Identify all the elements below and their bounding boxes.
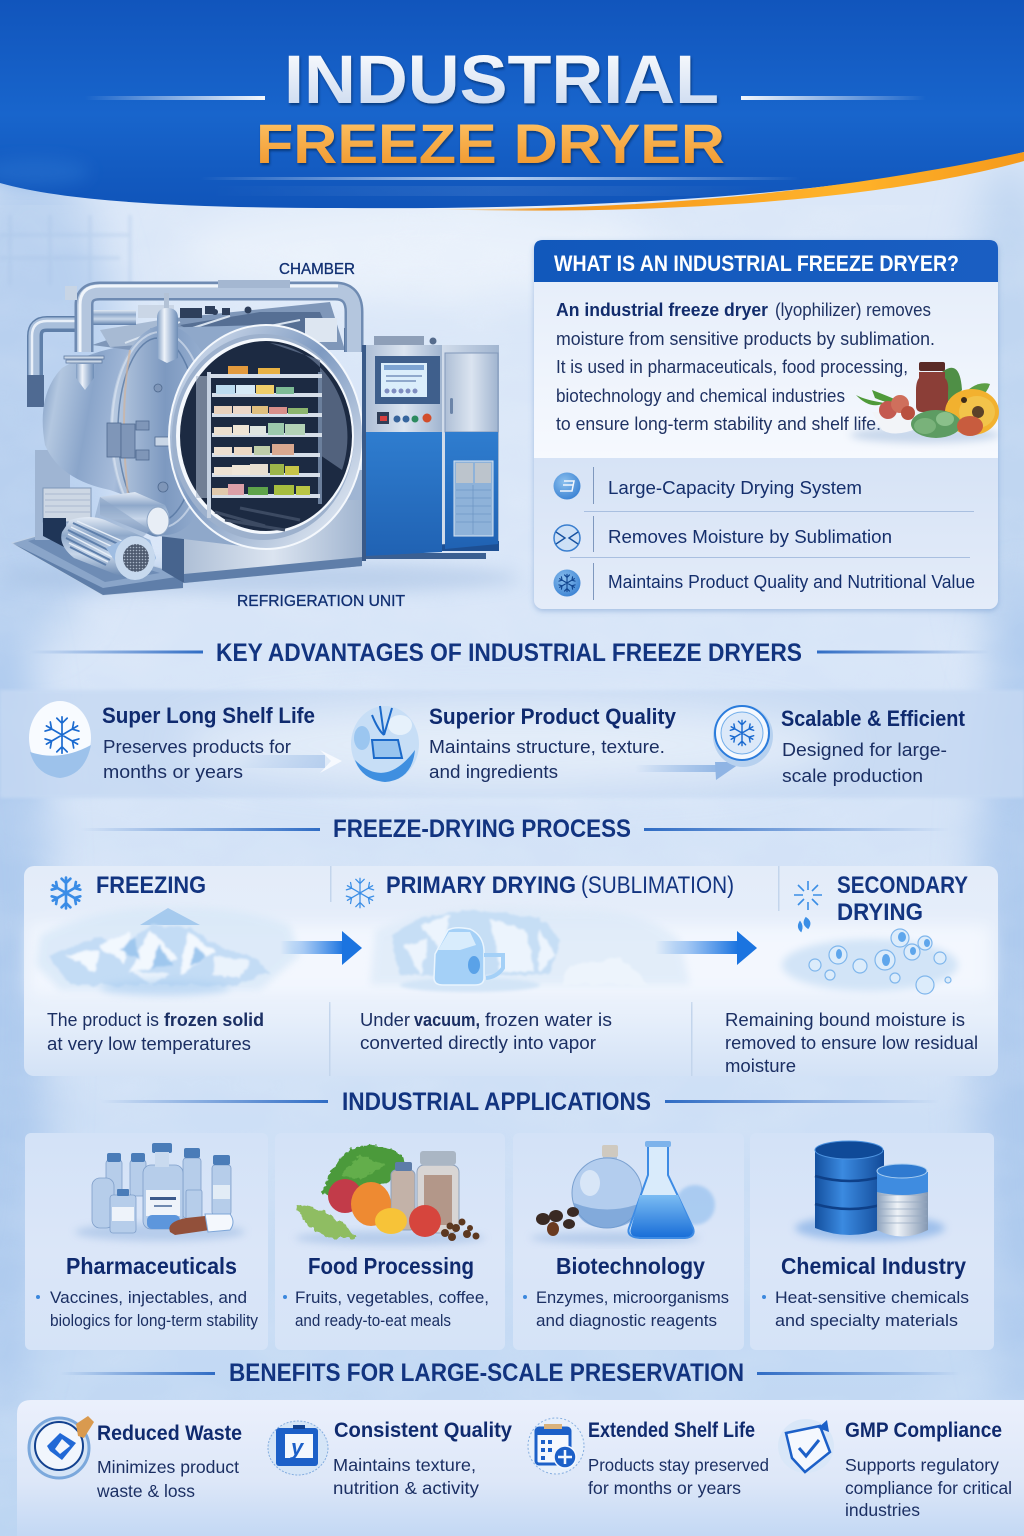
card: pharmaceuticals: biologics for long-term stability bbox=[50, 1311, 258, 1330]
benefit: consistent quality: Maintains texture, bbox=[333, 1455, 476, 1475]
main pipe bbox=[80, 286, 354, 352]
definition text: to ensure long-term stability and shelf life. bbox=[556, 414, 881, 434]
control cabinet bbox=[362, 336, 499, 561]
panel: benefits bbox=[17, 1400, 1024, 1536]
section heading: benefits bbox=[60, 1359, 960, 1387]
lower horizontal pipe bbox=[92, 310, 136, 325]
panel heading bar bbox=[534, 240, 998, 282]
benefit: GMP compliance: compliance for critical bbox=[845, 1478, 1012, 1498]
advantage 2: and ingredients bbox=[429, 762, 558, 782]
step 3: secondary drying: SECONDARY bbox=[837, 872, 968, 899]
card: chemical industry bbox=[750, 1133, 994, 1350]
advantage 1: Preserves products for bbox=[103, 737, 291, 757]
panel: freeze-drying process bbox=[24, 866, 998, 1076]
icon: consistent quality bbox=[268, 1421, 328, 1475]
snow scene band bbox=[30, 925, 990, 995]
step 3: secondary drying bbox=[725, 872, 978, 1076]
benefit: reduced waste: Minimizes product bbox=[97, 1457, 239, 1477]
advantage 2: Maintains structure, texture. bbox=[429, 737, 665, 757]
decorative title rule left bbox=[85, 96, 265, 100]
stand block bbox=[35, 450, 362, 583]
illustration: frozen product bbox=[36, 908, 300, 996]
control buttons bbox=[377, 412, 389, 424]
icon: consistent quality: y bbox=[290, 1435, 305, 1460]
compressor bbox=[100, 492, 169, 537]
advantage 2 bbox=[351, 704, 677, 782]
vent bbox=[454, 461, 493, 536]
top machinery bbox=[92, 302, 360, 352]
touch screen bbox=[375, 356, 440, 404]
label: refrigeration unit: REFRIGERATION UNIT bbox=[237, 593, 405, 610]
step 2: primary drying: PRIMARY DRYING bbox=[386, 872, 576, 899]
definition text: (lyophilizer) removes bbox=[775, 300, 931, 320]
icon: sublimation bbox=[554, 525, 580, 551]
card: food processing: and ready-to-eat meals bbox=[295, 1311, 451, 1330]
panel: what is an industrial freeze dryer bbox=[534, 240, 1000, 609]
advantage 1: Super Long Shelf Life bbox=[102, 703, 315, 728]
step 1: freezing: frozen solid bbox=[164, 1010, 264, 1030]
benefit: GMP compliance: industries bbox=[845, 1500, 920, 1520]
section heading: benefits: BENEFITS FOR LARGE-SCALE PRESERVATION bbox=[229, 1359, 744, 1387]
definition text bbox=[556, 300, 935, 434]
feature text 1: Large-Capacity Drying System bbox=[608, 478, 862, 498]
benefit: extended shelf life: Extended Shelf Life bbox=[588, 1419, 755, 1442]
step 3: secondary drying: removed to ensure low residual bbox=[725, 1033, 978, 1053]
card: chemical industry: and specialty materials bbox=[775, 1311, 958, 1330]
step 2: primary drying bbox=[346, 872, 734, 1053]
advantage 3: Scalable & Efficient bbox=[781, 706, 966, 731]
icon: calendar plus bbox=[528, 1418, 584, 1474]
icon: drying system bbox=[554, 472, 580, 500]
card: food processing: Fruits, vegetables, coffee, bbox=[295, 1288, 489, 1307]
definition text: It is used in pharmaceuticals, food processing, bbox=[556, 357, 908, 377]
icon: snowflake blue bbox=[52, 878, 80, 908]
step 2: primary drying: (SUBLIMATION) bbox=[581, 872, 734, 899]
benefit: consistent quality: nutrition & activity bbox=[333, 1478, 479, 1498]
freeze dryer machine illustration bbox=[0, 261, 520, 610]
card: biotechnology: Enzymes, microorganisms bbox=[536, 1288, 729, 1307]
vacuum cylinder bbox=[157, 293, 178, 363]
tray rack bbox=[196, 366, 322, 530]
advantage 1 bbox=[29, 701, 315, 782]
feature rows bbox=[554, 467, 975, 600]
card: chemical industry: Heat-sensitive chemicals bbox=[775, 1288, 969, 1307]
icon: snow snowflake bbox=[29, 701, 91, 778]
vacuum pump and motor bbox=[43, 488, 169, 580]
step 3: secondary drying: Remaining bound moisture is bbox=[725, 1010, 965, 1030]
coupling and cone bbox=[64, 356, 104, 390]
arrow: primary to secondary drying bbox=[655, 931, 757, 965]
advantage 3: scale production bbox=[782, 766, 923, 786]
card: pharmaceuticals: Pharmaceuticals bbox=[66, 1253, 237, 1279]
benefit: consistent quality bbox=[268, 1419, 512, 1498]
feature text 3: Maintains Product Quality and Nutritional Value bbox=[608, 572, 975, 592]
arrow 1 bbox=[235, 750, 342, 773]
section heading: key advantages bbox=[30, 639, 990, 667]
section heading: industrial applications bbox=[100, 1088, 940, 1116]
section heading: industrial applications: INDUSTRIAL APPLICATIONS bbox=[342, 1088, 651, 1116]
illustration: food bbox=[295, 1145, 485, 1245]
icon: reduced waste bbox=[29, 1416, 94, 1478]
benefit: reduced waste bbox=[29, 1416, 242, 1501]
header banner bbox=[0, 0, 1024, 211]
title line 1: INDUSTRIAL bbox=[284, 41, 719, 118]
step 3: secondary drying: DRYING bbox=[837, 899, 923, 926]
illustration: ice crystals bbox=[782, 929, 958, 994]
icon: scalable badge bbox=[713, 705, 773, 767]
benefit: extended shelf life bbox=[528, 1418, 769, 1498]
decorative title rule right bbox=[741, 96, 926, 100]
benefit: reduced waste: Reduced Waste bbox=[97, 1422, 242, 1445]
panel: key advantages bbox=[29, 701, 966, 786]
food illustration bbox=[850, 362, 1000, 443]
card: food processing bbox=[275, 1133, 505, 1350]
step 1: freezing: FREEZING bbox=[96, 872, 206, 899]
benefit: GMP compliance: GMP Compliance bbox=[845, 1419, 1002, 1442]
chamber opening bbox=[176, 338, 354, 534]
feature text 2: Removes Moisture by Sublimation bbox=[608, 527, 892, 547]
benefit: extended shelf life: Products stay preserved bbox=[588, 1455, 769, 1475]
benefit: GMP compliance bbox=[778, 1419, 1012, 1520]
chamber cylinder bbox=[43, 342, 165, 510]
door ring bbox=[169, 325, 363, 549]
panel heading bar: WHAT IS AN INDUSTRIAL FREEZE DRYER? bbox=[554, 251, 959, 276]
advantage 3: Designed for large- bbox=[782, 740, 947, 760]
definition text: moisture from sensitive products by sublimation. bbox=[556, 329, 935, 349]
card: chemical industry: Chemical Industry bbox=[781, 1253, 966, 1279]
step 2: primary drying: converted directly into vapor bbox=[360, 1033, 596, 1053]
icon: sparkle burst bbox=[794, 881, 822, 931]
flange bbox=[110, 325, 266, 549]
arrow: freezing to primary drying bbox=[280, 931, 362, 965]
definition text: An industrial freeze dryer bbox=[556, 300, 768, 320]
step 1: freezing bbox=[36, 872, 300, 1054]
advantage 1: months or years bbox=[103, 762, 243, 782]
benefit: GMP compliance: Supports regulatory bbox=[845, 1455, 999, 1475]
step 1: freezing: at very low temperatures bbox=[47, 1034, 251, 1054]
card: biotechnology: and diagnostic reagents bbox=[536, 1311, 717, 1330]
motor body bbox=[61, 517, 156, 579]
illustration: vials bbox=[75, 1143, 245, 1241]
door hinge bbox=[107, 384, 176, 492]
label: chamber: CHAMBER bbox=[279, 261, 355, 278]
illustration: flasks bbox=[530, 1141, 715, 1244]
step 3: secondary drying: moisture bbox=[725, 1056, 796, 1076]
definition text: biotechnology and chemical industries bbox=[556, 386, 845, 406]
advantage 2: Superior Product Quality bbox=[429, 704, 677, 729]
card: biotechnology bbox=[513, 1133, 744, 1350]
illustration: ice bottle bbox=[370, 908, 690, 992]
card: food processing: Food Processing bbox=[308, 1253, 474, 1279]
step 1: freezing: The product is bbox=[47, 1010, 159, 1030]
icon: snowflake thin bbox=[346, 878, 374, 908]
step 2: primary drying: frozen water is bbox=[485, 1010, 612, 1030]
panel: application cards bbox=[25, 1133, 994, 1350]
base platform bbox=[12, 535, 183, 595]
card: pharmaceuticals: Vaccines, injectables, and bbox=[50, 1288, 247, 1307]
illustration: drums bbox=[795, 1141, 945, 1241]
title line 2: FREEZE DRYER bbox=[256, 112, 725, 175]
section heading: freeze-drying process bbox=[80, 815, 950, 843]
step 2: primary drying: Under bbox=[360, 1010, 410, 1030]
arrow 2 bbox=[635, 762, 742, 780]
icon: frost bag bbox=[351, 706, 419, 782]
icon: quality bbox=[554, 570, 580, 596]
step 2: primary drying: vacuum, bbox=[414, 1010, 480, 1030]
advantage 3 bbox=[713, 705, 966, 786]
card: biotechnology: Biotechnology bbox=[556, 1253, 705, 1279]
card: pharmaceuticals bbox=[25, 1133, 268, 1350]
benefit: consistent quality: Consistent Quality bbox=[334, 1419, 512, 1442]
section heading: key advantages: KEY ADVANTAGES OF INDUSTRIAL FREEZE DRYERS bbox=[216, 639, 802, 667]
benefit: extended shelf life: for months or years bbox=[588, 1478, 741, 1498]
benefit: reduced waste: waste & loss bbox=[96, 1481, 195, 1501]
icon: GMP shield bbox=[778, 1419, 834, 1473]
section heading: freeze-drying process: FREEZE-DRYING PROCESS bbox=[333, 815, 631, 843]
left return pipe bbox=[32, 321, 78, 400]
